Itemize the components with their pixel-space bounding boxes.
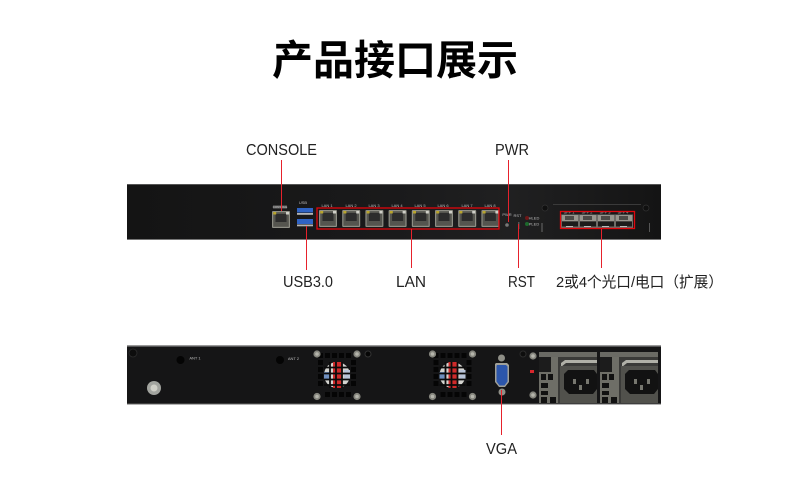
panel: rear device [127, 345, 661, 404]
icon: LAN ports: LAN 3 [368, 203, 380, 208]
icon: antenna holes: ANT 1 [189, 356, 201, 360]
rear chassis [127, 345, 661, 404]
front chassis [127, 184, 661, 240]
icon: console port: CONSOLE [273, 205, 287, 209]
icon: PWR and RST controls: HLED [529, 216, 539, 220]
icon: expansion module [541, 204, 650, 232]
icon: fan right [429, 350, 476, 400]
panel: front device [127, 184, 661, 240]
icon: expansion module: SFP 3 [599, 210, 611, 214]
icon: LAN ports: LAN 8 [484, 203, 496, 208]
icon: PWR and RST controls [502, 212, 539, 229]
icon: LAN ports: LAN 6 [437, 203, 449, 208]
icon: power supply left [539, 352, 597, 403]
icon: console port [272, 205, 290, 228]
LAN highlight box [317, 208, 499, 229]
icon: antenna holes: ANT 2 [288, 356, 300, 361]
label: LAN: LAN [396, 274, 426, 291]
label: PWR: PWR [495, 142, 529, 159]
icon: VGA port [495, 354, 509, 396]
label: RST: RST [508, 274, 535, 291]
optical highlight box [560, 212, 634, 228]
icon: PWR and RST controls: PLED [529, 222, 539, 226]
icon: fan left [313, 350, 361, 400]
icon: LAN ports: LAN 2 [345, 203, 357, 208]
callout lines [282, 160, 602, 435]
icon: LAN ports: LAN 1 [321, 203, 333, 208]
icon: USB ports [297, 200, 313, 226]
icon: USB ports: USB [299, 200, 307, 205]
icon: power supply right [600, 352, 658, 403]
label: USB3.0: USB3.0 [283, 274, 333, 291]
label: CONSOLE: CONSOLE [246, 142, 317, 159]
icon: screws beside power supply [529, 352, 537, 399]
icon: LAN ports [319, 203, 499, 227]
title: 产品接口展示 [272, 38, 518, 84]
icon: LAN ports: LAN 7 [461, 203, 473, 208]
icon: LAN ports: LAN 4 [391, 203, 403, 208]
label: VGA: VGA [486, 441, 518, 458]
icon: expansion module: SFP 4 [617, 210, 629, 214]
icon: PWR and RST controls: RST [514, 213, 522, 218]
icon: LAN ports: LAN 5 [414, 203, 426, 208]
icon: expansion module: SFP 1 [563, 210, 575, 214]
icon: ground screw [147, 381, 161, 395]
icon: antenna holes [176, 356, 300, 364]
icon: expansion module: SFP 2 [581, 210, 593, 214]
label: optical or electrical ports: 2或4个光口/电口（扩展） [556, 274, 723, 291]
icon: PWR and RST controls: PWR [502, 212, 512, 217]
